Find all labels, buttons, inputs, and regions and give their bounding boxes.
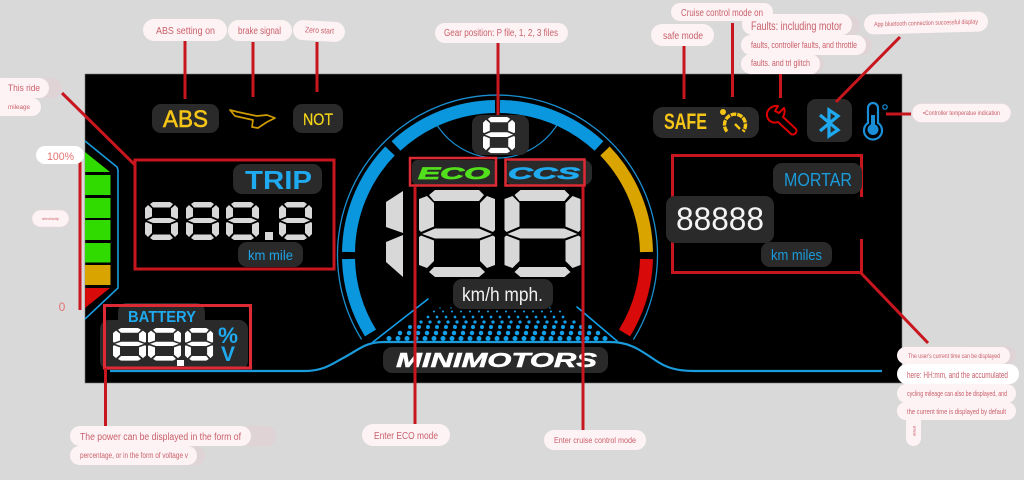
callout: this ride mileage: This ride — [8, 83, 40, 93]
ECO and CCS badges: CCS — [508, 164, 581, 183]
ECO and CCS badges: ECO — [418, 164, 490, 183]
callout: enter cruise control mode: Enter cruise control mode — [554, 436, 636, 445]
Minimotors logo — [383, 347, 608, 373]
total mileage readout: km miles — [771, 247, 822, 264]
callout: this ride mileage — [0, 78, 62, 116]
callout: electricity — [32, 210, 69, 227]
callout: zero start: Zero start — [305, 25, 335, 36]
battery readout: % — [218, 323, 238, 348]
icon: thermometer — [864, 103, 887, 139]
callout: gear position — [435, 23, 568, 43]
callout: power display form: percentage, or in the form of voltage v — [80, 451, 188, 460]
callout: power display form: The power can be displayed in the form of — [80, 432, 241, 443]
callout: current time and accumulated mileage: The user's current time can be displayed — [908, 353, 1000, 360]
total mileage readout — [666, 156, 866, 272]
total mileage readout: 88888 — [676, 201, 764, 237]
callout: zero start — [293, 20, 345, 42]
callout: battery scale 100 percent: 100% — [47, 151, 74, 163]
icon: cruise gauge — [720, 109, 746, 132]
ECO and CCS badges — [410, 158, 592, 186]
speed digits — [386, 190, 580, 277]
icon: fault wrench — [767, 106, 797, 135]
NOT indicator: NOT — [303, 110, 333, 129]
gear position digit — [472, 115, 529, 155]
callout: faults: Faults: including motor — [751, 19, 842, 33]
battery scale zero label: 0 — [59, 300, 66, 314]
speed unit label — [453, 279, 553, 309]
trip mileage readout: km mile — [248, 247, 293, 263]
callout: cruise control mode: Cruise control mode on — [681, 8, 763, 19]
ABS indicator: ABS — [163, 106, 208, 133]
dotted road graphic — [373, 299, 617, 342]
callout: safe mode: safe mode — [663, 31, 703, 42]
NOT indicator — [293, 104, 343, 133]
callout leader lines — [62, 23, 928, 430]
callout: gear position: Gear position: P file, 1, 2, 3 files — [444, 28, 558, 39]
callout: bluetooth connection: App bluetooth connection successful display — [874, 19, 979, 28]
callout: current time and accumulated mileage — [897, 346, 1019, 446]
callout: faults: faults, controller faults, and throttle — [751, 40, 857, 50]
SAFE and cruise indicator: SAFE — [664, 109, 707, 134]
battery readout: V — [221, 343, 235, 366]
callout: enter ECO mode — [362, 424, 450, 446]
callout: enter cruise control mode — [544, 430, 646, 450]
callout: this ride mileage: mileage — [8, 104, 30, 111]
callout: ABS setting — [143, 19, 227, 41]
battery readout — [100, 303, 250, 370]
callout: brake signal: brake signal — [238, 26, 281, 37]
trip mileage readout — [135, 160, 334, 269]
display panel background — [85, 74, 902, 383]
icon: bluetooth — [807, 99, 852, 142]
callout: enter ECO mode: Enter ECO mode — [374, 431, 438, 442]
ABS indicator — [152, 104, 219, 133]
trip mileage readout: TRIP — [245, 165, 312, 195]
callout: bluetooth connection — [864, 11, 988, 35]
callout: electricity: electricity — [42, 216, 59, 221]
total mileage readout: MORTAR — [784, 170, 852, 190]
SAFE and cruise indicator — [653, 107, 759, 138]
battery level bar — [85, 141, 118, 319]
callout: controller temperature — [912, 104, 1011, 122]
speed gauge arcs — [338, 95, 658, 339]
bottom blue contour line — [110, 342, 882, 371]
icon: brake lever — [230, 110, 275, 128]
speed unit label: km/h mph. — [462, 285, 543, 306]
callout: brake signal — [228, 20, 292, 41]
callout: current time and accumulated mileage: default — [912, 426, 916, 436]
Minimotors logo: MINIMOTORS — [396, 350, 598, 372]
callout: faults — [741, 14, 872, 74]
callout: power display form — [70, 426, 276, 465]
callout: safe mode — [651, 24, 714, 46]
callout: cruise control mode — [671, 3, 773, 21]
callout: faults: faults. and trl glitch — [751, 58, 810, 68]
callout: battery scale 100 percent — [36, 146, 84, 164]
callout: ABS setting: ABS setting on — [156, 25, 215, 37]
battery readout: BATTERY — [128, 309, 196, 326]
callout: controller temperature: ▪Controller temperatue indication — [923, 110, 1000, 117]
